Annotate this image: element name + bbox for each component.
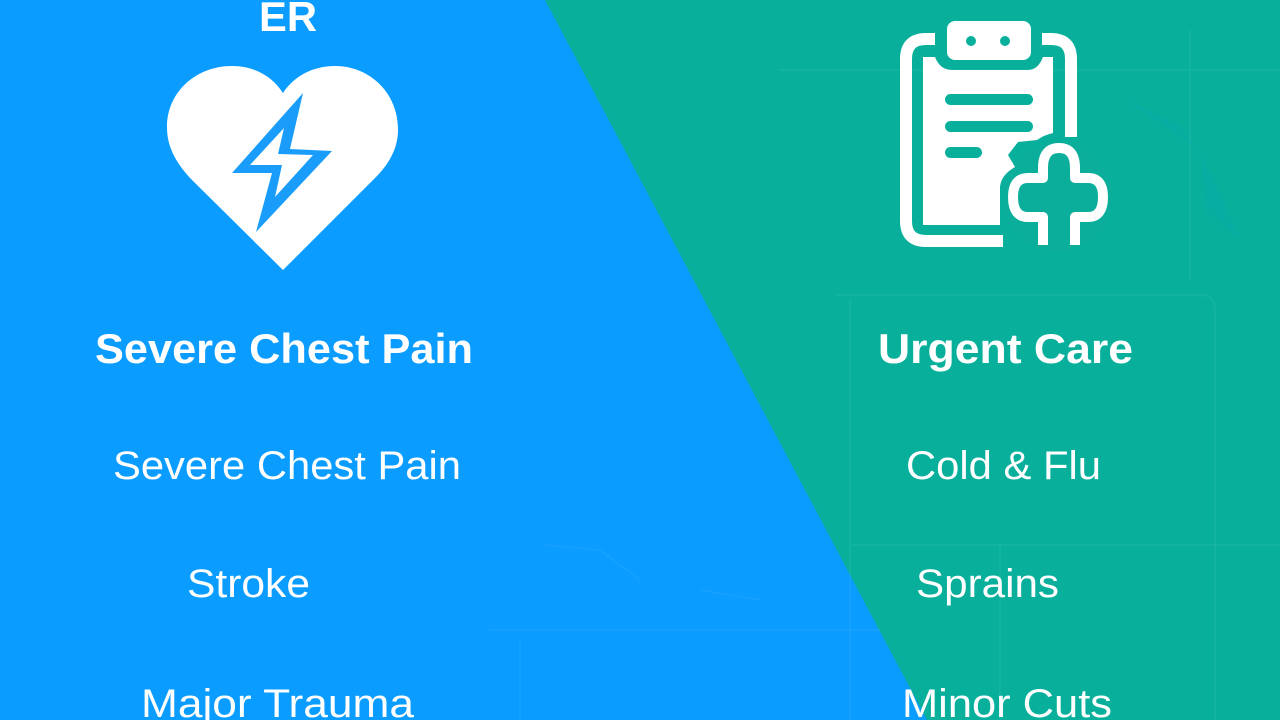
icon: clipboard with medical cross [906, 21, 1112, 252]
panel: urgent care background [545, 0, 1280, 720]
heading: urgent care: Urgent Care [878, 325, 1133, 372]
heading: severe chest pain: Severe Chest Pain [95, 325, 473, 372]
text: urgent care item sprains: Sprains [916, 562, 1059, 606]
text: ER item severe chest pain: Severe Chest Pain [113, 444, 461, 488]
text: ER item stroke: Stroke [187, 562, 310, 606]
icon: heart with lightning bolt [167, 66, 398, 270]
text: urgent care item cold and flu: Cold & Flu [906, 444, 1101, 488]
